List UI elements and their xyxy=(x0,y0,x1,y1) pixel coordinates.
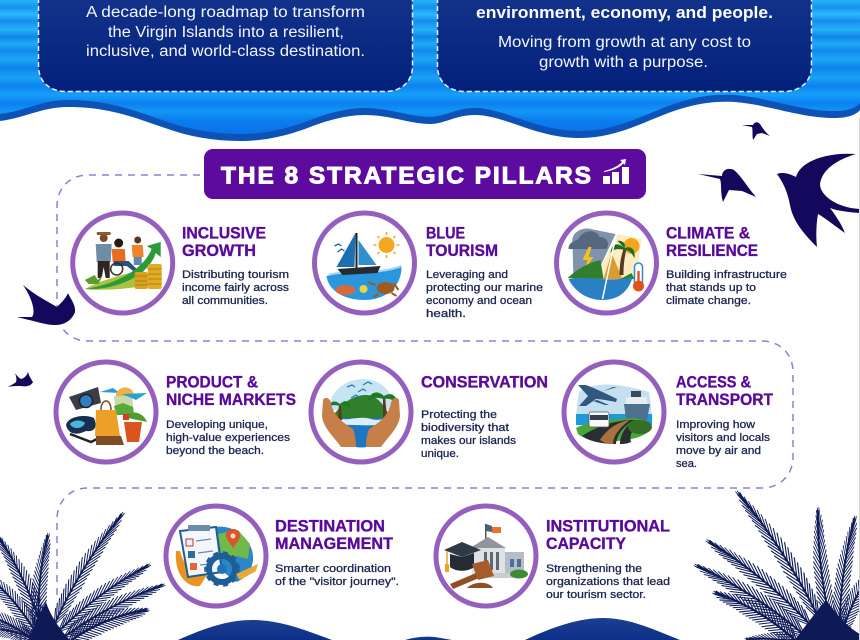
description xyxy=(676,419,770,470)
panel: purpose statement: growth with a purpose. xyxy=(539,54,708,71)
palm tree: left xyxy=(0,506,167,640)
heading xyxy=(666,224,758,260)
description: Strengthening the xyxy=(546,563,642,575)
pillar: destination management xyxy=(166,506,399,606)
description: beyond the beach. xyxy=(166,445,264,457)
heading: CAPACITY xyxy=(546,535,626,553)
title banner xyxy=(204,149,646,199)
bird: left swallow xyxy=(17,285,75,325)
description: visitors and locals xyxy=(676,432,770,444)
description xyxy=(546,563,670,601)
heading xyxy=(166,374,296,409)
description: that stands up to xyxy=(666,282,756,294)
header ocean band xyxy=(0,0,860,141)
description: makes our islands xyxy=(421,435,516,447)
description: income fairly across xyxy=(182,282,289,294)
description: sea. xyxy=(676,458,697,470)
pillar: blue tourism xyxy=(314,213,543,320)
pillar: inclusive growth xyxy=(73,213,289,313)
panel: roadmap intro: the Virgin Islands into a resilient, xyxy=(108,24,344,41)
description: Leveraging and xyxy=(426,269,508,281)
icon: sailboat, sun and sea life xyxy=(314,213,414,313)
palm tree: right xyxy=(693,484,860,640)
bottom waves xyxy=(178,618,680,640)
heading xyxy=(275,518,393,553)
description: move by air and xyxy=(676,445,761,457)
heading: PRODUCT & xyxy=(166,374,258,392)
heading xyxy=(426,224,498,260)
heading: DESTINATION xyxy=(275,518,385,536)
heading: MANAGEMENT xyxy=(275,535,393,553)
heading: ACCESS & xyxy=(676,374,751,392)
heading: RESILIENCE xyxy=(666,242,758,260)
pillar: institutional capacity xyxy=(436,506,670,606)
icon: rising bar chart xyxy=(603,159,629,184)
description xyxy=(426,269,543,320)
description xyxy=(275,563,399,588)
heading: INSTITUTIONAL xyxy=(546,518,670,536)
icon: hands holding island xyxy=(311,362,411,462)
description xyxy=(666,269,787,307)
heading: GROWTH xyxy=(182,242,256,260)
icon: checklist, map and gear xyxy=(166,506,266,606)
icon: building, graduation cap and gavel xyxy=(436,506,536,606)
description: biodiversity that xyxy=(421,422,510,434)
heading: NICHE MARKETS xyxy=(166,391,296,409)
description: all communities. xyxy=(182,295,268,307)
pillar: product and niche markets xyxy=(56,362,296,462)
panel: purpose statement: environment, economy, and people. xyxy=(476,4,773,22)
pillar: conservation xyxy=(311,362,548,462)
panel: roadmap intro: inclusive, and world-class destination. xyxy=(86,43,365,60)
bird: large swallow xyxy=(777,154,860,247)
icon: storm and sunny island split xyxy=(556,213,656,313)
description: Distributing tourism xyxy=(182,269,289,281)
panel: purpose statement xyxy=(438,0,812,92)
description: organizations that lead xyxy=(546,576,670,588)
pillar: access and transport xyxy=(564,362,773,470)
title banner: THE 8 STRATEGIC PILLARS xyxy=(221,162,591,190)
panel: roadmap intro: A decade-long roadmap to transform xyxy=(86,4,365,21)
icon: camera, mask, bag and drink xyxy=(56,362,156,462)
heading xyxy=(676,374,773,409)
heading: CLIMATE & xyxy=(666,224,750,242)
description: Developing unique, xyxy=(166,419,268,431)
description: protecting our marine xyxy=(426,282,543,294)
icon: people and rising arrow xyxy=(73,213,173,313)
description: high-value experiences xyxy=(166,432,290,444)
description xyxy=(421,409,516,460)
description: Building infrastructure xyxy=(666,269,787,281)
description: climate change. xyxy=(666,295,751,307)
panel: purpose statement: Moving from growth at any cost to xyxy=(498,34,751,51)
panel: roadmap intro xyxy=(38,0,412,92)
icon: plane, ship, bus and road xyxy=(564,362,664,462)
heading: TOURISM xyxy=(426,242,498,260)
description: unique. xyxy=(421,448,459,460)
bird: tiny swallow xyxy=(8,372,33,387)
heading: INCLUSIVE xyxy=(182,224,266,242)
description: Protecting the xyxy=(421,409,497,421)
description xyxy=(166,419,290,457)
pillar: climate and resilience xyxy=(556,213,787,313)
description xyxy=(182,269,289,307)
heading: BLUE xyxy=(426,224,465,242)
description: Smarter coordination xyxy=(275,563,391,575)
heading xyxy=(546,518,670,553)
description: health. xyxy=(426,308,466,320)
heading: TRANSPORT xyxy=(676,391,773,409)
description: of the "visitor journey". xyxy=(275,576,399,588)
bird: medium swallow xyxy=(698,169,756,202)
description: Improving how xyxy=(676,419,756,431)
heading xyxy=(182,224,266,260)
bird: small swallow xyxy=(742,122,770,140)
heading: CONSERVATION xyxy=(421,374,548,392)
description: economy and ocean xyxy=(426,295,532,307)
description: our tourism sector. xyxy=(546,589,646,601)
